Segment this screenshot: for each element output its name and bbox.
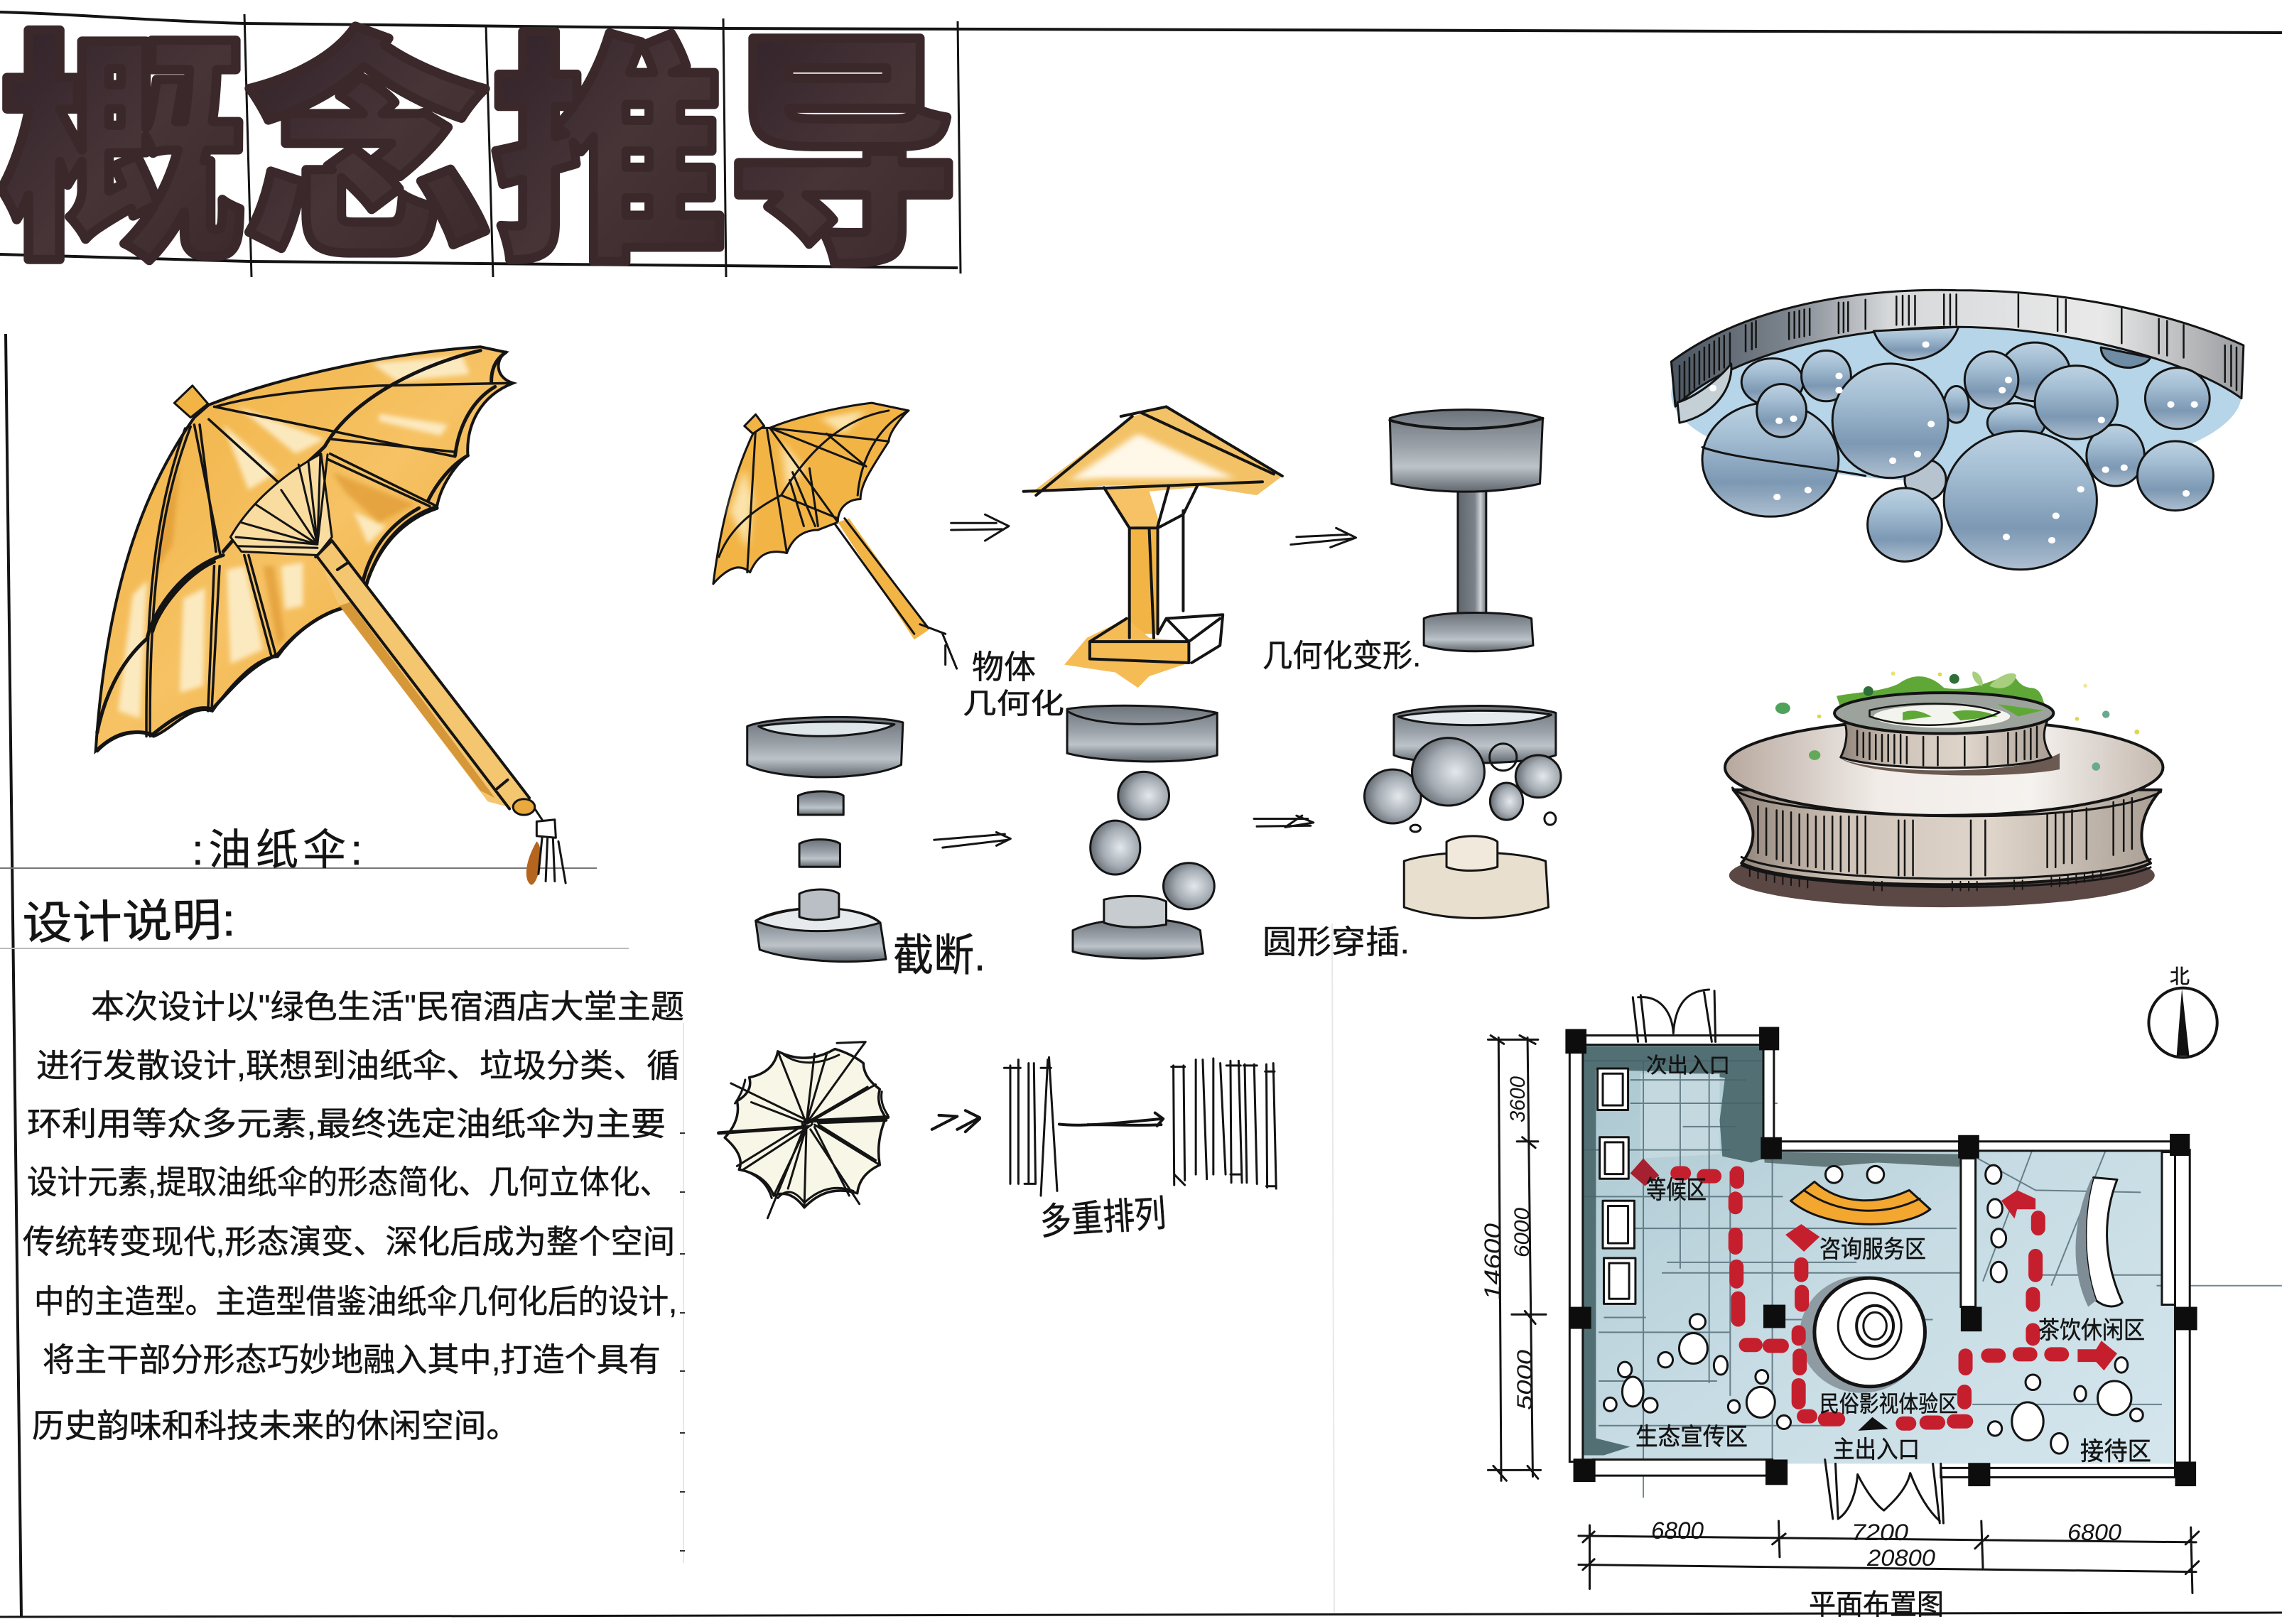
design description body text: 设计元素,提取油纸伞的形态简化、几何立体化、 — [27, 1164, 670, 1201]
arrow 4 — [1254, 816, 1314, 827]
plan caption: 平面布置图 — [1809, 1589, 1944, 1620]
ring band — [1671, 290, 2244, 406]
six strips — [1172, 1059, 1276, 1189]
plan zone labels: 次出入口 — [1646, 1054, 1730, 1078]
entrance triangle — [1858, 1417, 1888, 1431]
plan zone labels: 主出入口 — [1833, 1436, 1920, 1463]
reception desk — [1791, 1166, 1930, 1224]
umbrella top view — [719, 1042, 888, 1218]
large oil-paper umbrella illustration — [96, 347, 566, 885]
horizontal dimensions — [1579, 1521, 2199, 1593]
curved display wall — [2076, 1177, 2122, 1307]
design description body text: 环利用等众多元素,最终选定油纸伞为主要 — [27, 1105, 666, 1142]
title: 导 — [726, 22, 961, 292]
plan zone labels: 等候区 — [1646, 1175, 1707, 1204]
plan dimension numbers: 20800 — [1866, 1545, 1935, 1571]
plan zone labels — [1635, 965, 2190, 1466]
geometric lamp — [1024, 407, 1282, 688]
design description body text: 中的主造型。主造型借鉴油纸伞几何化后的设计, — [34, 1283, 677, 1320]
concept derivation sketches — [713, 403, 1561, 962]
planter — [1834, 693, 2060, 775]
three strips — [1004, 1057, 1057, 1196]
arrow 5 — [932, 1110, 980, 1132]
label: circle interpenetration: 圆形穿插. — [1262, 924, 1410, 960]
plan dimension numbers: 6800 — [2067, 1520, 2121, 1545]
greenery — [1775, 671, 2139, 771]
umbrella fan ribs — [230, 454, 332, 556]
floor plan — [1488, 988, 2282, 1593]
plan dimension numbers: 6000 — [1510, 1208, 1534, 1257]
doors — [1633, 990, 1943, 1523]
plan dimension numbers: 14600 — [1480, 1223, 1505, 1300]
design description body text — [23, 988, 684, 1444]
plan zone labels: 接待区 — [2080, 1436, 2151, 1466]
plan dimension numbers: 6800 — [1651, 1517, 1704, 1544]
plan zone labels: 咨询服务区 — [1819, 1236, 1926, 1263]
umbrella handle — [315, 541, 535, 815]
stools and tables — [1604, 1165, 2143, 1454]
arrow 3 — [934, 832, 1010, 848]
central round feature — [1800, 1276, 1925, 1393]
plan dimension numbers: 5000 — [1513, 1350, 1537, 1410]
disc with intersecting spheres — [1364, 706, 1561, 918]
grey lamp — [1390, 410, 1543, 651]
design description body text: 将主干部分形态巧妙地融入其中,打造个具有 — [43, 1341, 661, 1378]
bubbles — [1677, 327, 2213, 570]
plan grid lines — [1577, 1061, 2282, 1498]
title — [0, 18, 961, 292]
walls — [1569, 1035, 2190, 1478]
route arrows — [1631, 1159, 2117, 1370]
cut-off: disc and small cylinders — [747, 717, 903, 962]
seat base — [1725, 719, 2163, 891]
disc with spheres — [1067, 705, 1217, 958]
label: cut off: 截断. — [893, 931, 985, 980]
chandelier with glass bubbles — [1671, 290, 2244, 570]
design description heading: 设计说明: — [22, 894, 236, 949]
small umbrella — [713, 403, 957, 668]
label: oil paper umbrella: :油纸伞: — [192, 826, 362, 874]
vertical dimensions — [1488, 1035, 1546, 1480]
plan dimension numbers: 3600 — [1506, 1076, 1530, 1122]
plan zone labels: 茶饮休闲区 — [2038, 1317, 2145, 1344]
plan zone labels: 生态宣传区 — [1635, 1424, 1748, 1451]
label: object geometrisation: 几何化 — [963, 688, 1064, 720]
floor colour — [1583, 1046, 2178, 1463]
label: geometric deformation: 几何化变形. — [1262, 639, 1421, 673]
arrow 1 — [951, 514, 1009, 541]
design description body text: 历史韵味和科技未来的休闲空间。 — [32, 1407, 519, 1444]
label: multiple arrangement: 多重排列 — [1039, 1193, 1167, 1243]
umbrella tassel — [526, 808, 566, 885]
arrow 6 — [1059, 1113, 1163, 1126]
design description body text: 本次设计以"绿色生活"民宿酒店大堂主题 — [91, 988, 684, 1025]
arrow 2 — [1291, 528, 1356, 547]
label: object geometrisation — [963, 649, 1064, 720]
design description body text: 传统转变现代,形态演变、深化后成为整个空间 — [23, 1223, 675, 1260]
seats — [1598, 1068, 1635, 1304]
title: 推 — [492, 20, 726, 290]
plan dimension numbers: 7200 — [1851, 1520, 1908, 1545]
top-view umbrella and repeated strips — [719, 1042, 1276, 1218]
design description body text: 进行发散设计,联想到油纸伞、垃圾分类、循 — [36, 1047, 680, 1084]
plan zone labels: 北 — [2170, 965, 2190, 987]
round planter seat — [1725, 671, 2163, 907]
circulation route — [1677, 1173, 2062, 1424]
plan dimension numbers — [1480, 1076, 2121, 1571]
finial — [174, 386, 208, 418]
label: object geometrisation: 物体 — [972, 649, 1036, 686]
title: 念 — [245, 18, 490, 288]
columns — [1565, 1027, 2197, 1486]
plan zone labels: 民俗影视体验区 — [1819, 1391, 1958, 1417]
north symbol — [2148, 988, 2217, 1058]
title: 概 — [0, 18, 247, 288]
